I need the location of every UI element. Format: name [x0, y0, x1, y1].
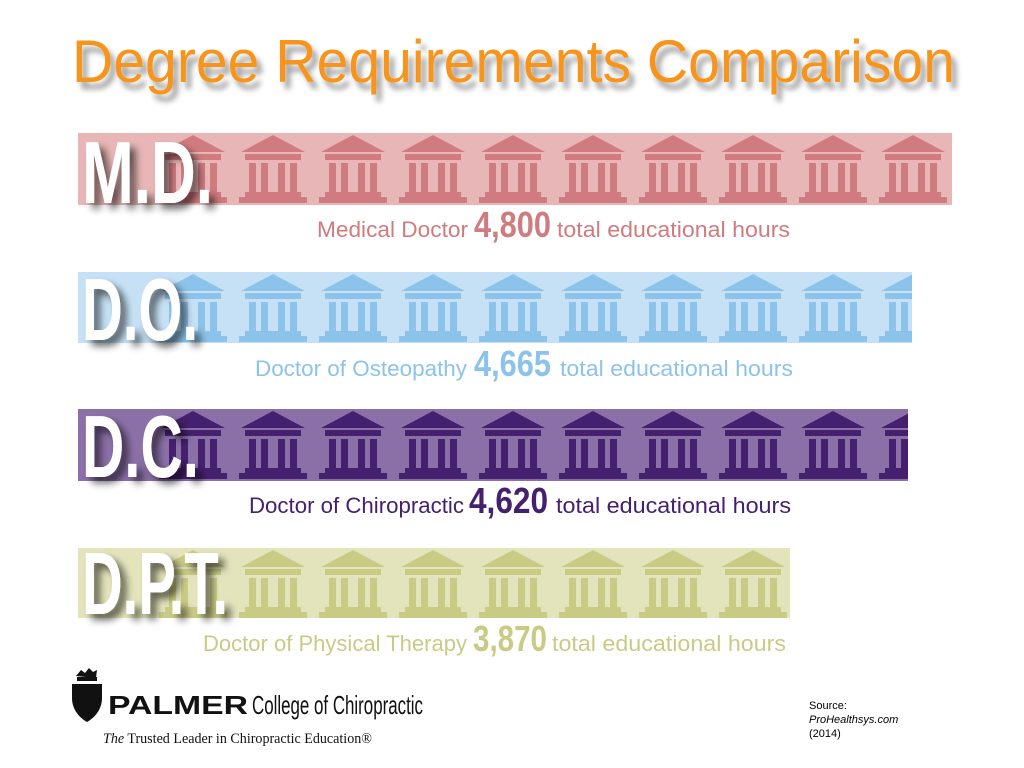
source note: (2014): [809, 728, 841, 740]
label: D.P.T.: D.P.T.: [82, 534, 228, 633]
caption: chiropractic: total educational hours: [556, 493, 791, 518]
panel: M.D.: [78, 123, 952, 245]
panel: D.P.T.: [78, 534, 790, 659]
logo: Palmer: [72, 668, 423, 747]
caption: physical therapy: total educational hours: [552, 631, 786, 656]
caption: physical therapy: [203, 618, 786, 659]
tagline: The Trusted Leader in Chiropractic Education®: [103, 731, 372, 747]
source note: ProHealthsys.com: [809, 714, 898, 726]
icon: shield crest: [72, 668, 102, 722]
caption: osteopathy: 4,665: [474, 343, 551, 384]
caption: physical therapy: Doctor of Physical Therapy: [203, 631, 467, 656]
caption: chiropractic: [249, 480, 791, 521]
logo: Palmer: College of Chiropractic: [252, 690, 423, 720]
panel: D.O.: [78, 260, 912, 384]
label: D.C.: D.C.: [82, 397, 199, 496]
logo: Palmer: PALMER: [108, 690, 248, 720]
caption: osteopathy: total educational hours: [560, 356, 793, 381]
caption: osteopathy: Doctor of Osteopathy: [255, 356, 467, 381]
panel: D.C.: [78, 397, 908, 521]
caption: medical doctor: [317, 204, 790, 245]
caption: medical doctor: total educational hours: [557, 217, 790, 242]
caption: chiropractic: 4,620: [469, 480, 548, 521]
caption: osteopathy: [255, 343, 793, 384]
caption: medical doctor: Medical Doctor: [317, 217, 468, 242]
caption: physical therapy: 3,870: [473, 618, 547, 659]
source note: [809, 700, 898, 740]
title: Degree Requirements Comparison: [72, 28, 955, 95]
caption: medical doctor: 4,800: [474, 204, 551, 245]
caption: chiropractic: Doctor of Chiropractic: [249, 493, 464, 518]
label: M.D.: M.D.: [82, 123, 213, 222]
source note: Source:: [809, 700, 847, 712]
label: D.O.: D.O.: [82, 260, 198, 359]
